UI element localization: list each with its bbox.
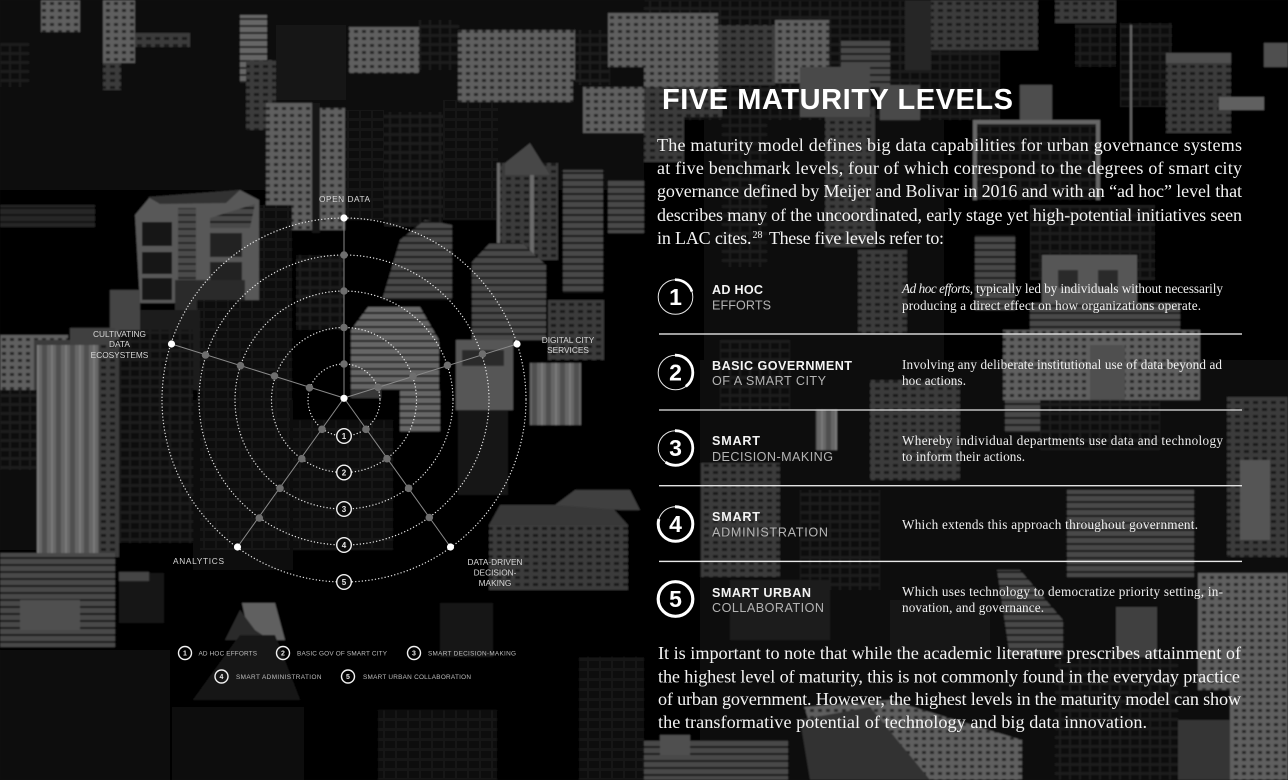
divider — [659, 561, 1242, 562]
ring number badges: 3 — [342, 505, 347, 514]
level 3 title: SMART — [712, 434, 760, 448]
intro paragraph: in LAC cites. — [657, 228, 752, 248]
icon: level 4 progress ring: 4 — [669, 511, 682, 537]
chart legend: 4 — [220, 674, 224, 681]
ring number badges: 2 — [342, 468, 347, 478]
ring number badges: 1 — [342, 432, 347, 441]
axis label: cultivating data ecosystems: DATA — [109, 339, 130, 349]
chart legend — [178, 646, 516, 683]
intro paragraph: governance defined by Meijer and Bolivar in 2016 and with an “ad hoc” level that — [657, 181, 1242, 201]
axis label: cultivating data ecosystems: ECOSYSTEMS — [91, 350, 149, 360]
level 1 title: AD HOC — [712, 283, 763, 297]
axis label: data-driven decision-making: DATA-DRIVEN — [467, 557, 523, 567]
level 4: smart administration — [658, 507, 1198, 541]
level 2 description: Involving any deliberate institutional use of data beyond ad — [902, 357, 1222, 372]
chart legend: BASIC GOV OF SMART CITY — [297, 650, 388, 658]
divider — [659, 485, 1242, 486]
intro paragraph: 28 — [752, 230, 762, 241]
heading: FIVE MATURITY LEVELS — [662, 84, 1013, 116]
divider — [659, 333, 1242, 335]
icon: level 3 progress ring: 3 — [669, 435, 682, 461]
level 5 title: SMART URBAN — [712, 586, 811, 600]
axis label: data-driven decision-making: DECISION- — [474, 568, 517, 578]
closing paragraph: of urban government. However, the highest levels in the maturity model can show — [658, 689, 1242, 709]
icon: level 1 progress ring — [658, 280, 693, 314]
level 2: basic government — [658, 355, 1222, 390]
level 5: smart urban collaboration — [658, 582, 1223, 616]
level 1: ad hoc efforts — [658, 280, 1223, 314]
radar chart — [91, 194, 595, 589]
divider — [659, 409, 1242, 411]
chart legend: 2 — [281, 650, 285, 658]
intro paragraph: at five benchmark levels, four of which correspond to the degrees of smart city — [657, 158, 1242, 178]
icon: level 3 progress ring — [658, 431, 693, 465]
chart legend: 5 — [346, 674, 350, 681]
level 1 description: producing a direct effect on how organizations operate. — [902, 298, 1201, 313]
intro paragraph: These five levels refer to: — [769, 228, 944, 248]
axis label: data-driven decision-making: MAKING — [479, 578, 511, 588]
level 3: smart decision-making — [658, 431, 1223, 465]
level 5 description: Which uses technology to democratize priority setting, in- — [902, 584, 1223, 599]
chart legend: AD HOC EFFORTS — [198, 650, 257, 658]
spokes — [172, 218, 517, 547]
level 1 title: EFFORTS — [712, 298, 771, 312]
level 3 description: Whereby individual departments use data and technology — [902, 433, 1223, 448]
icon: level 5 progress ring — [658, 582, 693, 616]
closing paragraph: It is important to note that while the academic literature prescribes attainment of — [658, 643, 1242, 663]
level 1 description: Ad hoc efforts, — [901, 281, 973, 296]
axis label: cultivating data ecosystems: CULTIVATING — [93, 329, 146, 339]
ring number badges: 5 — [342, 578, 347, 587]
level 4 title: ADMINISTRATION — [712, 526, 828, 540]
chart legend: SMART DECISION-MAKING — [428, 650, 516, 658]
level 3 description: to inform their actions. — [902, 449, 1025, 464]
chart legend: 3 — [412, 650, 416, 658]
axis label: open data: OPEN DATA — [319, 194, 370, 204]
level 2 title: OF A SMART CITY — [712, 374, 827, 388]
icon: level 5 progress ring: 5 — [669, 586, 682, 612]
level 5 description: novation, and governance. — [902, 600, 1044, 615]
level 4 description: Which extends this approach throughout government. — [902, 517, 1198, 532]
level 4 title: SMART — [712, 510, 760, 524]
concentric maturity rings — [162, 218, 526, 582]
chart legend: SMART URBAN COLLABORATION — [363, 674, 471, 681]
axis label: digital city services: DIGITAL CITY — [542, 335, 595, 345]
ring number badges — [337, 429, 351, 589]
chart legend: 1 — [183, 650, 187, 658]
icon: level 1 progress ring: 1 — [669, 284, 682, 310]
intro paragraph: describes many of the uncoordinated, early stage yet high-potential initiatives seen — [657, 205, 1242, 225]
spoke nodes — [168, 214, 521, 551]
icon: level 2 progress ring: 2 — [669, 360, 682, 386]
level 2 title: BASIC GOVERNMENT — [712, 359, 852, 373]
level 5 title: COLLABORATION — [712, 601, 824, 615]
closing paragraph: the highest level of maturity, this is not commonly found in the everyday practice — [658, 666, 1240, 686]
closing paragraph: the transformative potential of technology and big data innovation. — [658, 712, 1147, 732]
chart legend: SMART ADMINISTRATION — [236, 674, 322, 681]
level 1 description: typically led by individuals without necessarily — [976, 281, 1223, 296]
ring number badges: 4 — [342, 541, 347, 550]
icon: level 4 progress ring — [658, 507, 693, 541]
level 2 description: hoc actions. — [902, 373, 966, 388]
intro paragraph: The maturity model defines big data capabilities for urban governance systems — [657, 135, 1242, 155]
level 3 title: DECISION-MAKING — [712, 450, 833, 464]
axis label: digital city services: SERVICES — [547, 345, 589, 355]
icon: level 2 progress ring — [658, 355, 693, 390]
axis label: analytics: ANALYTICS — [173, 556, 224, 566]
